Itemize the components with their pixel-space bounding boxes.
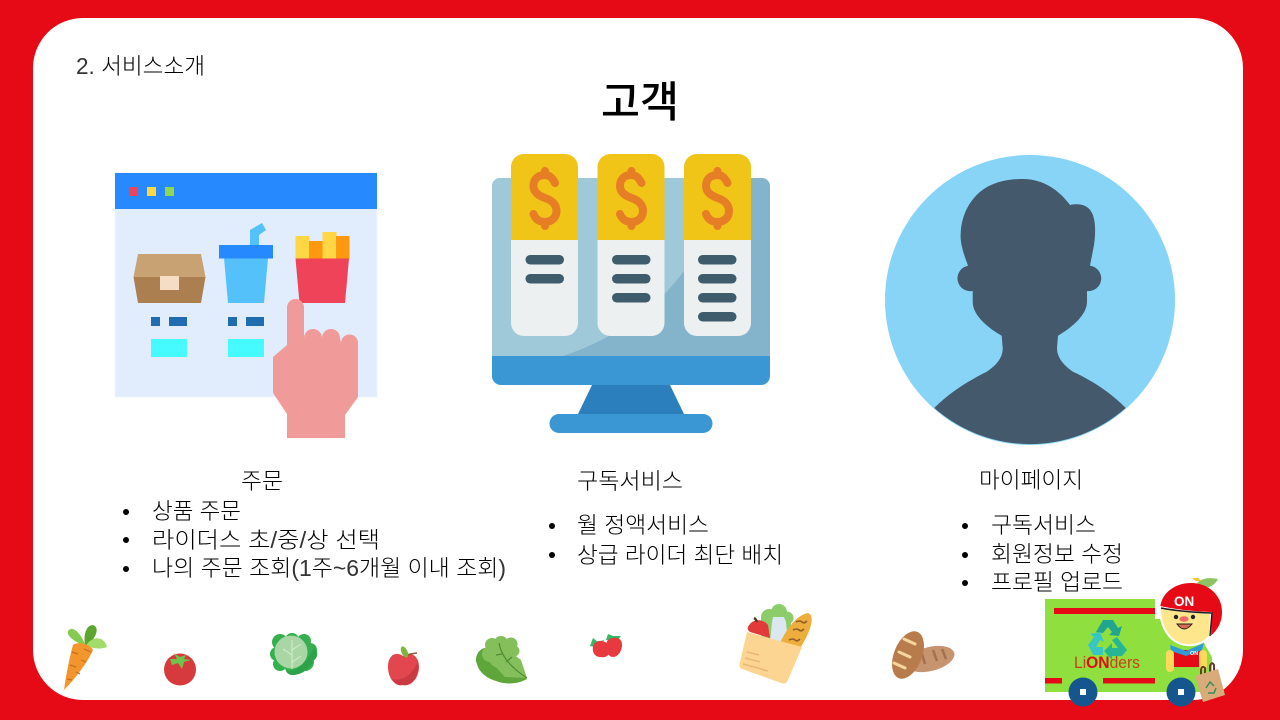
icon: cabbage [270, 633, 317, 675]
wheel left [1068, 678, 1098, 706]
text block: order: 나의 주문 조회(1주~6개월 이내 조회) [152, 555, 506, 581]
plan card 2 [598, 154, 664, 336]
pointing hand [273, 299, 358, 438]
icon: mascot character: ON [1190, 651, 1198, 657]
icon: user profile silhouette [885, 155, 1175, 445]
text block: subscription service: 월 정액서비스 [577, 512, 709, 538]
icon: LiONders delivery truck [1045, 599, 1212, 706]
text block: subscription service: 상급 라이더 최단 배치 [577, 542, 783, 568]
icon: bread [886, 627, 957, 683]
shopping bag [1195, 663, 1225, 702]
text block: my page: 구독서비스 [991, 512, 1096, 538]
LiONders wordmark: LiONders [1074, 654, 1140, 672]
food box [134, 254, 206, 357]
drink cup [219, 223, 273, 357]
text block: order [123, 468, 506, 581]
text block: my page [962, 467, 1123, 595]
recycle logo [1088, 620, 1127, 660]
text block: my page: 프로필 업로드 [991, 569, 1123, 595]
icon: tomato [164, 653, 196, 686]
text block: my page: 회원정보 수정 [991, 541, 1123, 567]
text block: order: 주문 [241, 468, 283, 494]
title: 고객 [601, 79, 679, 127]
icon: subscription plans on monitor [492, 154, 770, 433]
text block: subscription service [549, 468, 783, 568]
icon: grocery bag [739, 604, 812, 684]
text block: order: 라이더스 초 /중/상 선택 [152, 527, 380, 553]
icon: apple [388, 645, 419, 685]
text block: subscription service: 구독서비스 [577, 468, 683, 494]
icon: lettuce [476, 636, 527, 683]
text block: order: 상품 주문 [152, 498, 241, 524]
plan card 1 [511, 154, 578, 336]
icon: mascot character [1160, 578, 1225, 702]
icon: mascot character: ON [1174, 594, 1194, 609]
plan card 3 [684, 154, 751, 336]
icon: strawberries [590, 634, 622, 657]
icon: online food order window [115, 173, 377, 438]
french fries [296, 232, 350, 303]
icon: carrot [64, 625, 107, 690]
section heading: 2. 서비스소개 [76, 53, 205, 79]
text block: my page: 마이페이지 [979, 467, 1083, 493]
wheel right [1166, 678, 1196, 706]
